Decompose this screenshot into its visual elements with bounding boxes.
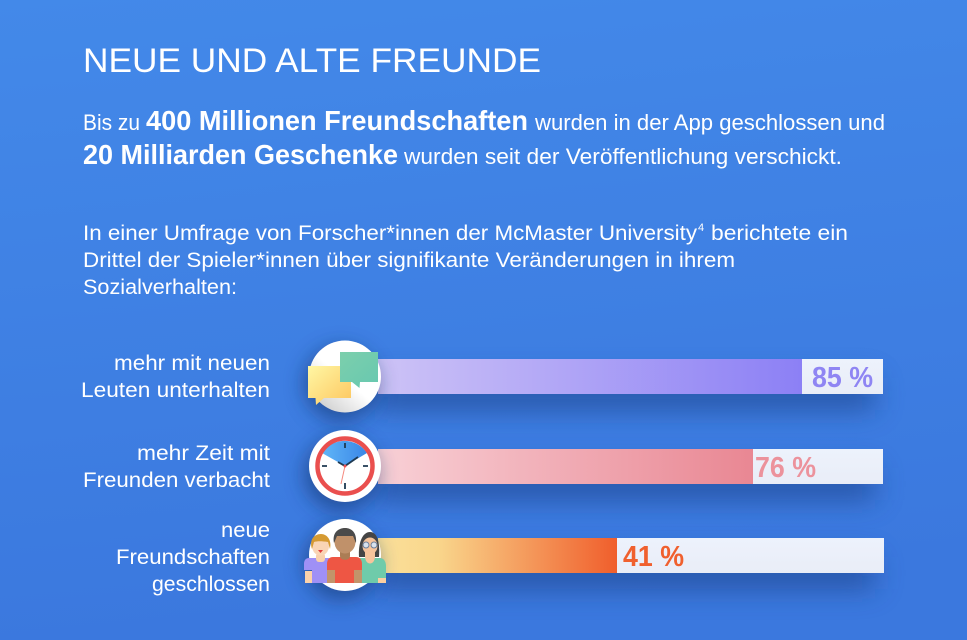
row 3: new friendships	[116, 519, 884, 600]
label: neue Freundschaften geschlossen: Freundschaften	[116, 546, 270, 569]
text block: key figures	[83, 105, 885, 170]
text block: survey intro: Sozialverhalten:	[83, 276, 237, 299]
title: NEUE UND ALTE FREUNDE	[83, 42, 541, 80]
text block: survey intro: berichtete ein	[711, 222, 848, 245]
label: mehr Zeit mit Freunden verbacht	[83, 442, 270, 492]
bar shadow	[375, 557, 875, 589]
label: mehr mit neuen Leuten unterhalten: Leuten unterhalten	[81, 379, 270, 402]
label: mehr mit neuen Leuten unterhalten: mehr mit neuen	[114, 352, 270, 375]
row 2: more time with friends	[83, 430, 883, 511]
bar: 41 %: 41 %	[623, 541, 684, 573]
label: neue Freundschaften geschlossen: neue	[221, 519, 270, 542]
label: mehr Zeit mit Freunden verbacht: mehr Zeit mit	[137, 442, 270, 465]
text block: key figures: Bis zu	[83, 110, 140, 135]
text block: survey intro	[83, 222, 848, 299]
label: neue Freundschaften geschlossen: geschlossen	[152, 573, 270, 596]
bar: 76 %	[378, 449, 883, 484]
person: man in red shirt	[327, 528, 362, 583]
text block: survey intro: 4	[698, 222, 704, 234]
bar: 85 %	[378, 359, 883, 394]
person: blond man	[304, 534, 330, 583]
text block: survey intro: Drittel der Spieler*innen über signifikante Veränderungen in ihrem	[83, 249, 735, 272]
text block: key figures: 400 Millionen Freundschaften	[146, 105, 528, 136]
text block: survey intro: In einer Umfrage von Forscher*innen der McMaster University	[83, 222, 698, 245]
bar: 41 %	[378, 538, 884, 573]
bar: 76 %: 76 %	[755, 452, 816, 484]
bar shadow	[375, 378, 875, 410]
label: neue Freundschaften geschlossen	[116, 519, 270, 596]
text block: key figures: wurden in der App geschlossen und	[534, 110, 885, 135]
person: woman with glasses	[359, 532, 386, 583]
bar shadow	[375, 468, 875, 500]
icon: three friends	[304, 519, 386, 600]
label: mehr Zeit mit Freunden verbacht: Freunden verbacht	[83, 469, 270, 492]
row 1: more conversations with new people	[81, 340, 883, 421]
icon: clock	[304, 430, 381, 511]
label: mehr mit neuen Leuten unterhalten	[81, 352, 270, 402]
icon: speech bubbles	[304, 340, 381, 421]
bar: 85 %: 85 %	[812, 362, 873, 394]
text block: key figures: wurden seit der Veröffentlichung verschickt.	[403, 144, 842, 169]
text block: key figures: 20 Milliarden Geschenke	[83, 139, 398, 170]
